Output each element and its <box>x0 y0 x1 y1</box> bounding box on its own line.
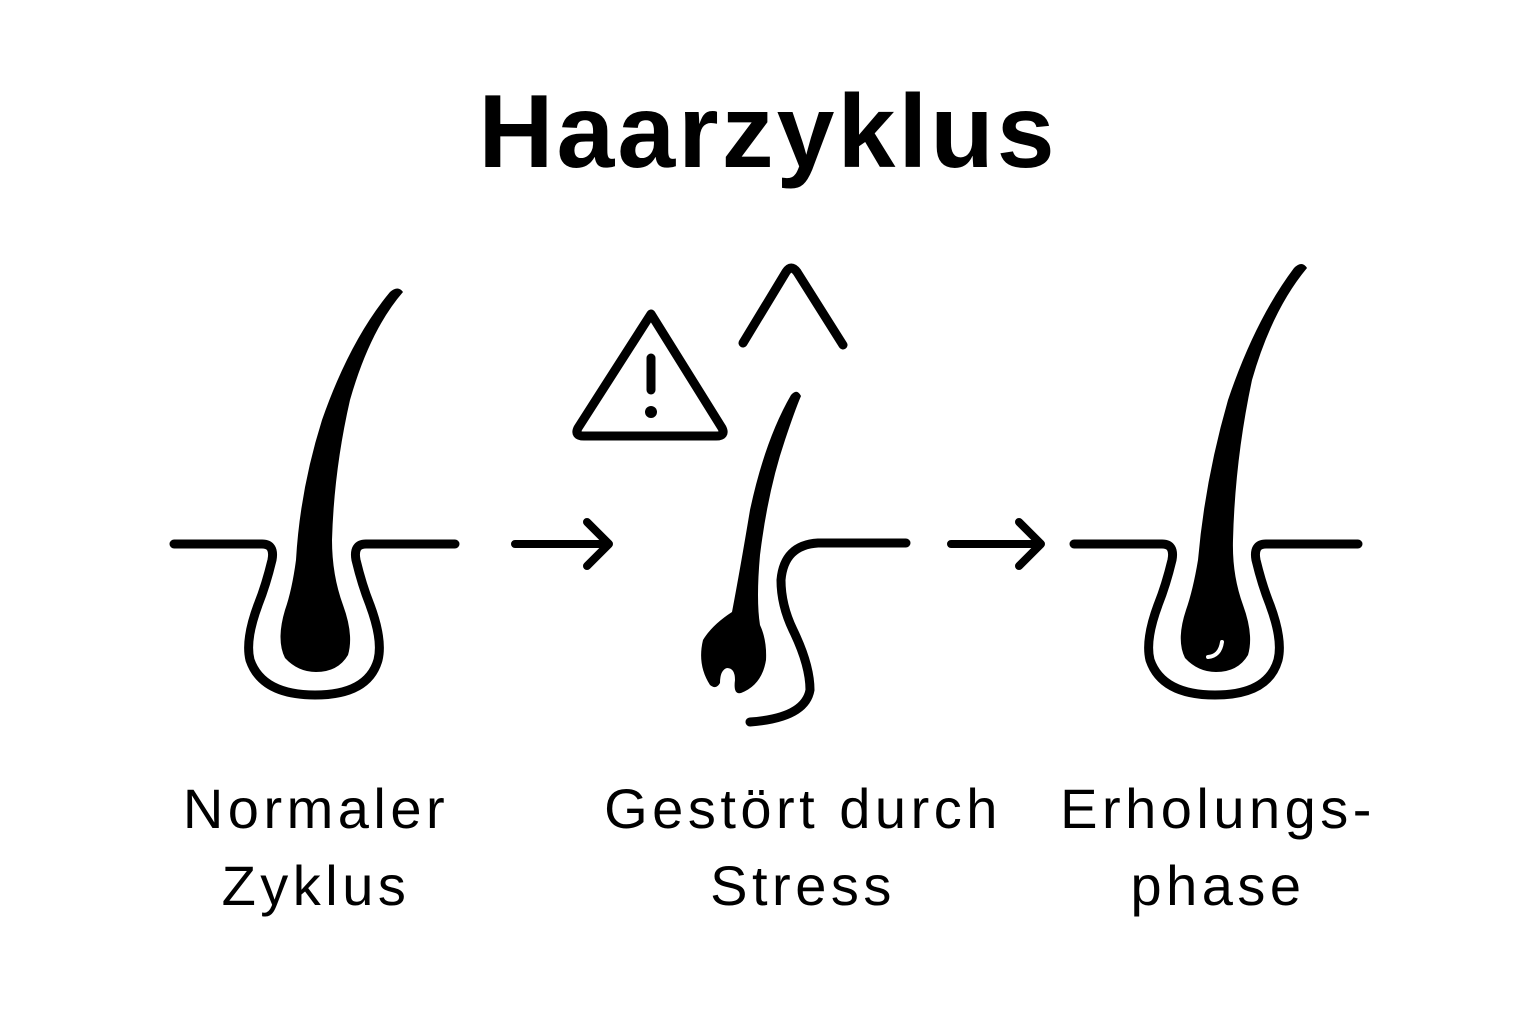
label: Gestört durch Stress <box>604 777 1002 917</box>
label: Normaler Zyklus <box>183 777 449 917</box>
stage 1: normal hair follicle <box>174 288 455 695</box>
label: Erholungsphase: Erholungs- <box>1060 777 1376 840</box>
label: Gestört durch Stress: Stress <box>710 854 896 917</box>
label: Normaler Zyklus: Zyklus <box>222 854 410 917</box>
arrow 2 <box>951 522 1041 566</box>
stage 3: recovery hair follicle <box>1074 264 1358 695</box>
title: Haarzyklus <box>478 74 1058 190</box>
label: Erholungsphase <box>1060 777 1376 917</box>
label: Normaler Zyklus: Normaler <box>183 777 449 840</box>
label: Erholungsphase: phase <box>1130 854 1306 917</box>
icon: warning triangle <box>577 314 723 436</box>
stage 2: stressed hair follicle <box>701 392 906 722</box>
arrow 1 <box>515 522 609 566</box>
icon: caret <box>743 268 843 345</box>
label: Gestört durch Stress: Gestört durch <box>604 777 1002 840</box>
